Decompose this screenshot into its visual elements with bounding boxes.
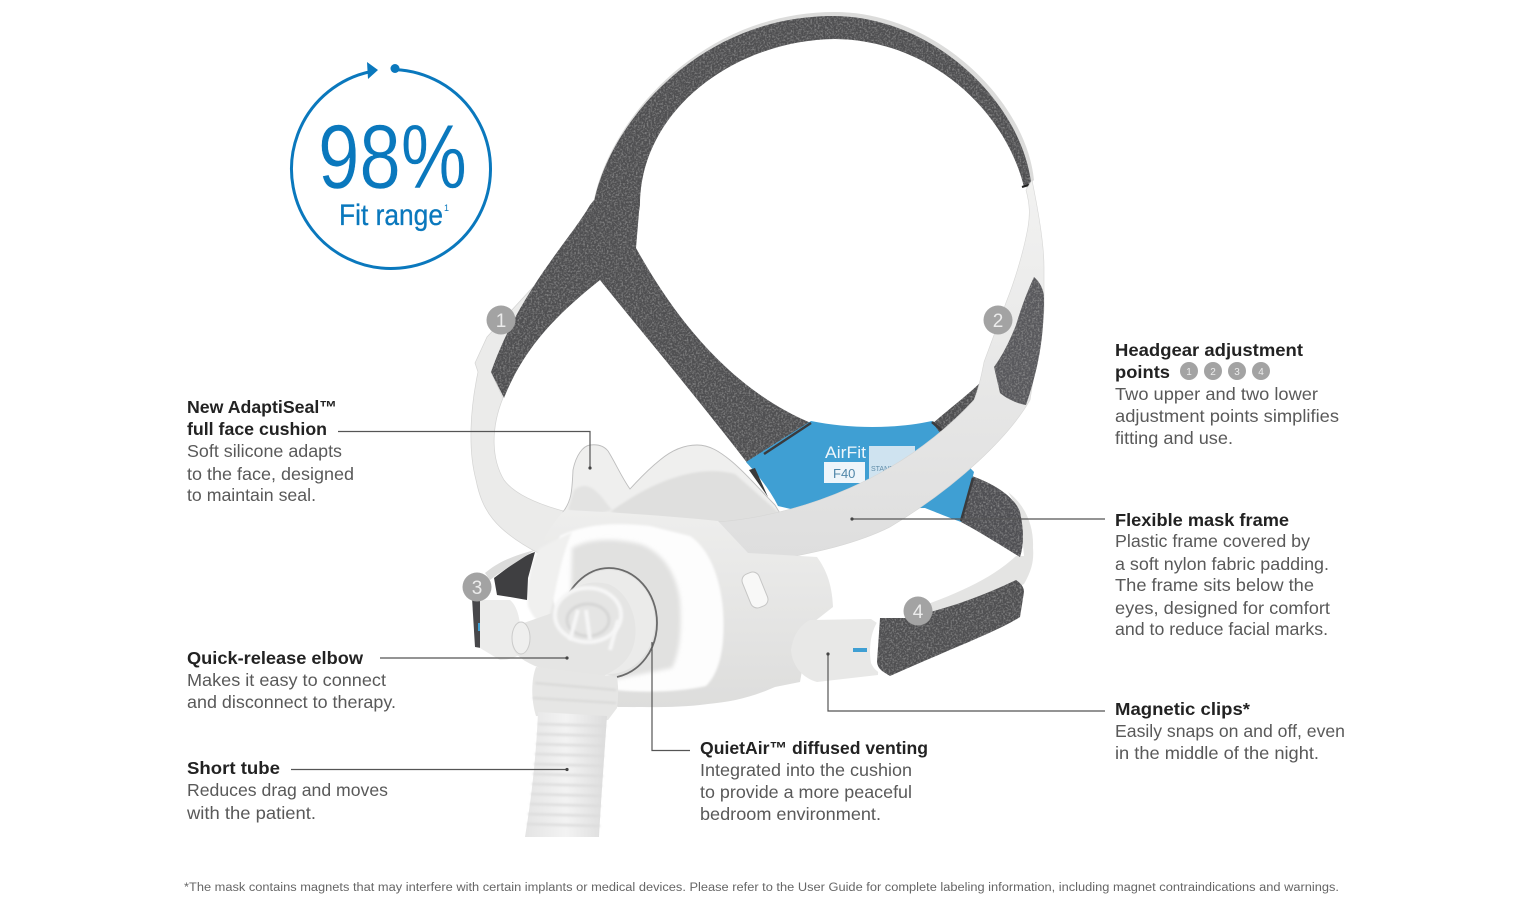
leader line: frame: [850, 517, 1105, 521]
numbered badge 3: 3: [472, 578, 482, 599]
numbered badge 4: 4: [913, 602, 924, 623]
numbered badge 2: [984, 306, 1012, 334]
callout: AdaptiSeal cushion: to maintain seal.: [187, 485, 316, 505]
badge: 98% fit range: 98%: [318, 107, 467, 208]
short ribbed tube: [525, 667, 618, 837]
callout: magnetic clips: Magnetic clips*: [1115, 699, 1250, 719]
callout: headgear adjustment points: Two upper and two lower: [1115, 384, 1318, 404]
callout: flexible mask frame: [1115, 510, 1330, 639]
blue rear panel: F40: [833, 466, 855, 481]
leader line: clips: [826, 652, 1105, 711]
callout: headgear adjustment points: 1: [1186, 367, 1192, 378]
callout: headgear adjustment points: adjustment points simplifies: [1115, 406, 1339, 426]
leader line: cushion: [338, 432, 592, 470]
callout: magnetic clips: Easily snaps on and off, even: [1115, 721, 1345, 741]
junction, left strap and lower strap: [491, 200, 811, 464]
footnote: *The mask contains magnets that may interfere with certain implants or medical devices. Please refer to the User Guide for complete labeling information, including magnet contraindications and warnings.: [184, 882, 1339, 894]
blue rear panel: AirFit: [825, 443, 866, 462]
callout: QuietAir venting: to provide a more peaceful: [700, 782, 912, 802]
callout: quick-release elbow: Quick-release elbow: [187, 648, 363, 668]
badge: 98% fit range: Fit range: [339, 199, 443, 232]
callout: quick-release elbow: [187, 648, 396, 712]
callout: AdaptiSeal cushion: full face cushion: [187, 419, 327, 439]
left frame arm and buckle: [471, 287, 567, 554]
callout: QuietAir venting: bedroom environment.: [700, 804, 881, 824]
callout: headgear adjustment points: points: [1115, 362, 1170, 382]
badge: 98% fit range: [291, 62, 490, 268]
callout: AdaptiSeal cushion: [187, 397, 354, 505]
numbered badge 3: [462, 572, 492, 602]
callout: flexible mask frame: Plastic frame covered by: [1115, 531, 1310, 551]
back lower strap: [905, 476, 1033, 622]
right upper strap fragment: [932, 380, 1000, 450]
callout: QuietAir venting: [700, 738, 928, 824]
callout: flexible mask frame: Flexible mask frame: [1115, 510, 1289, 530]
callout: magnetic clips: in the middle of the night.: [1115, 743, 1319, 763]
callout: headgear adjustment points: Headgear adjustment: [1115, 340, 1303, 360]
cushion top silicone: [563, 445, 790, 540]
callout: quick-release elbow: and disconnect to therapy.: [187, 692, 396, 712]
numbered badge 2: 2: [993, 311, 1003, 332]
callout: flexible mask frame: and to reduce facial marks.: [1115, 619, 1328, 639]
callout: flexible mask frame: eyes, designed for comfort: [1115, 598, 1330, 618]
callout: headgear adjustment points: 2: [1210, 367, 1216, 378]
callout: short tube: Reduces drag and moves: [187, 780, 388, 800]
numbered badge 1: [486, 306, 516, 334]
numbered badge 1: 1: [496, 311, 506, 332]
flexible mask frame arc: [718, 180, 1044, 560]
magnetic clip with lower pad: [791, 580, 1024, 682]
callout: quick-release elbow: Makes it easy to connect: [187, 670, 386, 690]
callout: flexible mask frame: a soft nylon fabric padding.: [1115, 554, 1329, 574]
headband top strap: [590, 12, 1034, 230]
callout: headgear adjustment points: [1115, 340, 1339, 448]
blue rear panel: STANDARD: [871, 466, 909, 473]
mask body: [528, 510, 833, 707]
callout: short tube: with the patient.: [186, 803, 316, 823]
callout: magnetic clips: [1115, 699, 1345, 763]
badge: 98% fit range: 1: [444, 203, 449, 213]
callout: headgear adjustment points: fitting and use.: [1115, 428, 1233, 448]
callout: AdaptiSeal cushion: to the face, designed: [187, 464, 354, 484]
illustration: full face mask with headgear: [462, 12, 1044, 837]
callout: short tube: [186, 758, 388, 823]
callout: QuietAir venting: QuietAir™ diffused venting: [700, 738, 928, 758]
callout: AdaptiSeal cushion: New AdaptiSeal™: [187, 397, 337, 417]
callout: QuietAir venting: Integrated into the cushion: [700, 760, 912, 780]
callout: headgear adjustment points: 3: [1234, 367, 1240, 378]
leader line: tube: [291, 768, 569, 771]
left clip with strap end: [472, 550, 535, 660]
leader line: venting: [652, 642, 690, 750]
quick-release elbow: [512, 582, 636, 678]
leader line: elbow: [380, 656, 569, 660]
blue rear panel: [746, 421, 974, 522]
right pad: [994, 277, 1044, 405]
numbered badge 4: [904, 596, 932, 626]
callout: AdaptiSeal cushion: Soft silicone adapts: [187, 441, 342, 461]
callout: flexible mask frame: The frame sits below the: [1115, 575, 1314, 595]
callout: headgear adjustment points: 4: [1258, 367, 1264, 378]
callout: short tube: Short tube: [187, 758, 280, 778]
